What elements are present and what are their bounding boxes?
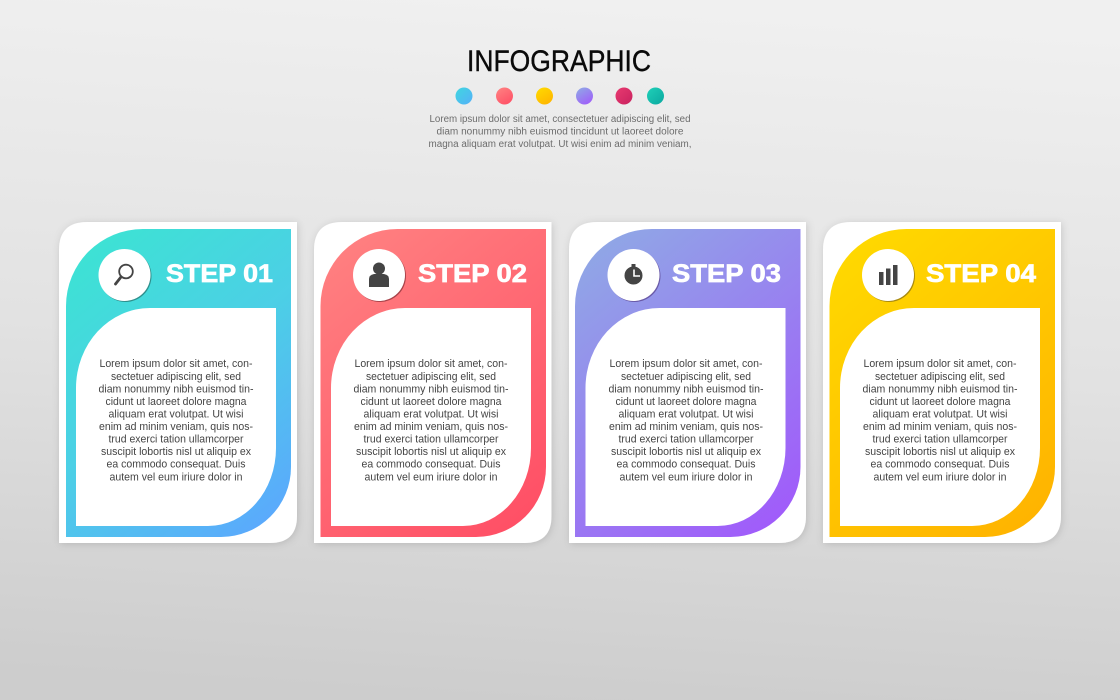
body text: ea commodo consequat. Duis — [106, 458, 246, 470]
panel: step 04 — [823, 222, 1061, 543]
body text: Lorem ipsum dolor sit amet, con- — [610, 358, 763, 370]
body text: aliquam erat volutpat. Ut wisi — [108, 408, 244, 420]
body text: ea commodo consequat. Duis — [870, 458, 1010, 470]
body text: enim ad minim veniam, quis nos- — [99, 421, 253, 433]
body text: enim ad minim veniam, quis nos- — [609, 421, 763, 433]
body text — [354, 358, 509, 484]
body text: cidunt ut laoreet dolore magna — [360, 396, 502, 408]
body text: enim ad minim veniam, quis nos- — [354, 421, 508, 433]
icon: person — [353, 249, 406, 302]
coloured frame — [830, 229, 1055, 537]
card backing — [823, 222, 1061, 543]
body text: suscipit lobortis nisl ut aliquip ex — [101, 446, 251, 458]
heading: STEP 02 — [418, 260, 527, 288]
title: INFOGRAPHIC — [467, 45, 651, 78]
icon: magnifier — [98, 249, 152, 302]
body text: cidunt ut laoreet dolore magna — [616, 396, 757, 408]
intro text — [428, 114, 692, 150]
body text: autem vel eum iriure dolor in — [364, 472, 498, 484]
coloured frame — [66, 229, 291, 537]
body text: enim ad minim veniam, quis nos- — [863, 421, 1017, 433]
body text: sectetuer adipiscing elit, sed — [621, 371, 751, 383]
inner text area — [586, 308, 786, 526]
intro text: Lorem ipsum dolor sit amet, consectetuer adipiscing elit, sed — [430, 114, 690, 125]
body text: Lorem ipsum dolor sit amet, con- — [864, 358, 1017, 370]
card backing — [59, 222, 297, 543]
body text — [608, 358, 764, 484]
body text: aliquam erat volutpat. Ut wisi — [364, 408, 498, 420]
body text — [98, 358, 254, 484]
body text: suscipit lobortis nisl ut aliquip ex — [611, 446, 761, 458]
body text: sectetuer adipiscing elit, sed — [366, 371, 496, 383]
body text: autem vel eum iriure dolor in — [620, 472, 752, 484]
body text: autem vel eum iriure dolor in — [110, 472, 242, 484]
body text: trud exerci tation ullamcorper — [618, 434, 754, 446]
panel: step 01 — [59, 222, 297, 543]
coloured frame — [575, 229, 800, 537]
intro text: magna aliquam erat volutpat. Ut wisi enim ad minim veniam, — [428, 139, 692, 150]
colour dots row — [456, 88, 664, 104]
card backing — [569, 222, 806, 543]
inner text area — [331, 308, 531, 526]
inner text area — [840, 308, 1040, 526]
inner text area — [76, 308, 276, 526]
panel: step 03 — [569, 222, 806, 543]
body text: ea commodo consequat. Duis — [616, 458, 756, 470]
icon: bar chart — [862, 249, 915, 302]
heading: STEP 03 — [672, 260, 781, 288]
body text: Lorem ipsum dolor sit amet, con- — [100, 358, 253, 370]
body text: aliquam erat volutpat. Ut wisi — [618, 408, 754, 420]
body text — [862, 358, 1018, 484]
body text: trud exerci tation ullamcorper — [108, 434, 244, 446]
body text: diam nonummy nibh euismod tin- — [862, 384, 1018, 396]
body text: cidunt ut laoreet dolore magna — [106, 396, 247, 408]
body text: sectetuer adipiscing elit, sed — [111, 371, 241, 383]
card backing — [314, 222, 552, 543]
body text: cidunt ut laoreet dolore magna — [870, 396, 1011, 408]
body text: suscipit lobortis nisl ut aliquip ex — [356, 446, 506, 458]
body text: diam nonummy nibh euismod tin- — [608, 384, 764, 396]
body text: sectetuer adipiscing elit, sed — [875, 371, 1005, 383]
intro text: diam nonummy nibh euismod tincidunt ut laoreet dolore — [436, 126, 684, 138]
body text: ea commodo consequat. Duis — [362, 458, 501, 470]
coloured frame — [320, 229, 546, 537]
panel: step 02 — [314, 222, 552, 543]
body text: trud exerci tation ullamcorper — [872, 434, 1008, 446]
body text: Lorem ipsum dolor sit amet, con- — [354, 358, 508, 370]
body text: aliquam erat volutpat. Ut wisi — [872, 408, 1008, 420]
heading: STEP 04 — [926, 260, 1036, 288]
body text: suscipit lobortis nisl ut aliquip ex — [865, 446, 1015, 458]
heading: STEP 01 — [166, 260, 273, 288]
body text: autem vel eum iriure dolor in — [874, 472, 1006, 484]
body text: diam nonummy nibh euismod tin- — [354, 384, 509, 396]
icon: stopwatch — [608, 249, 660, 302]
body text: diam nonummy nibh euismod tin- — [98, 384, 254, 396]
body text: trud exerci tation ullamcorper — [364, 434, 499, 446]
